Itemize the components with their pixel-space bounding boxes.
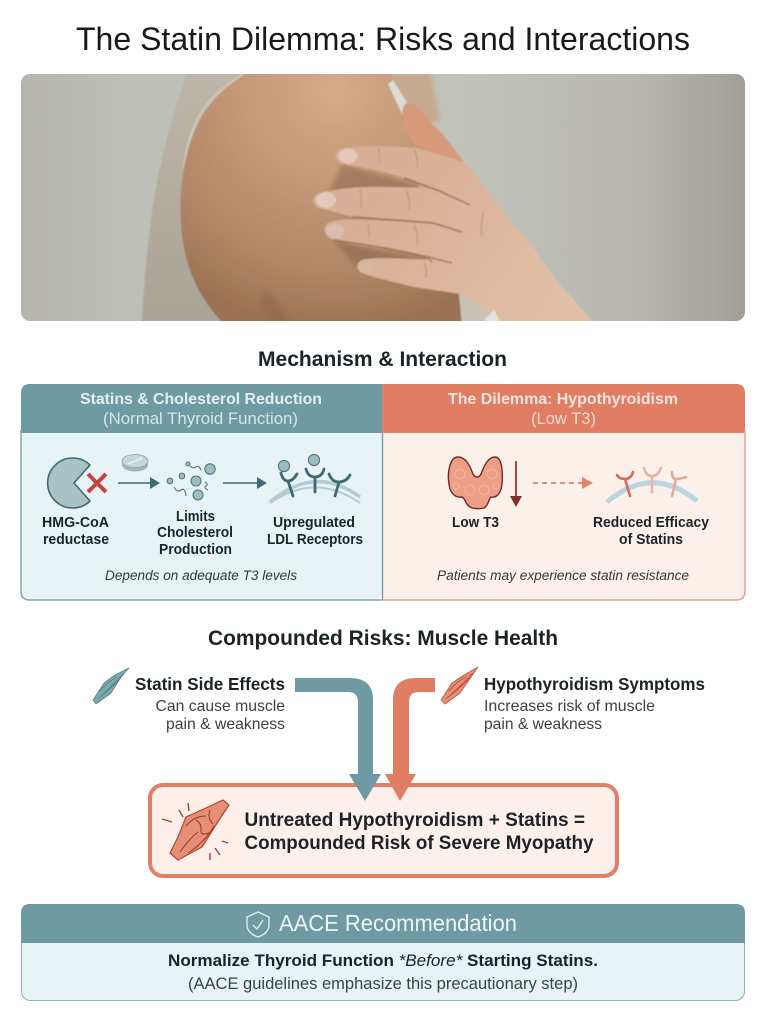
- panel heading: (Normal Thyroid Function): [103, 409, 298, 428]
- label: reduced efficacy: Reduced Efficacy: [593, 515, 709, 531]
- icon: strained muscle: [162, 800, 229, 860]
- text: hypothyroidism symptoms: pain & weakness: [484, 716, 602, 733]
- arrow: teal to callout: [295, 678, 381, 801]
- label: limits cholesterol production: [157, 509, 233, 558]
- label: limits cholesterol production: Cholesterol: [157, 525, 233, 541]
- panel: AACE recommendation: [21, 904, 745, 1000]
- icon: statin pill: [122, 454, 148, 472]
- label: low T3: Low T3: [452, 515, 499, 531]
- panel: statins and cholesterol reduction: [21, 384, 382, 600]
- callout text: Compounded Risk of Severe Myopathy: [244, 833, 594, 854]
- icon: thyroid gland: [448, 457, 502, 509]
- callout text: [244, 810, 594, 854]
- note: statin resistance: Patients may experience statin resistance: [437, 568, 689, 583]
- heading: compounded risks: Compounded Risks: Muscle Health: [208, 627, 558, 650]
- label: upregulated LDL receptors: [267, 515, 363, 548]
- text: statin side effects: Statin Side Effects: [135, 674, 285, 694]
- label: reduced efficacy: [593, 515, 709, 548]
- knuckle creases: [360, 148, 484, 278]
- icon: coral muscle: [441, 667, 478, 704]
- text: statin side effects: pain & weakness: [166, 716, 285, 733]
- label: reduced efficacy: of Statins: [619, 532, 683, 548]
- panel heading: (Low T3): [531, 409, 596, 428]
- arrow: T3 down: [510, 461, 522, 507]
- icon: cholesterol molecules: [167, 462, 215, 500]
- label: upregulated LDL receptors: Upregulated: [273, 515, 355, 531]
- title: The Statin Dilemma: Risks and Interactions: [76, 21, 690, 57]
- label: HMG-CoA reductase: [42, 515, 110, 548]
- icon: teal muscle: [93, 668, 129, 704]
- panel heading: [80, 391, 322, 428]
- fingers: [357, 258, 470, 294]
- panel heading: [448, 391, 678, 428]
- panel: the dilemma hypothyroidism: [382, 384, 745, 600]
- label: limits cholesterol production: Limits: [176, 509, 215, 525]
- tank top: [142, 74, 241, 321]
- icon: upregulated LDL receptors: [270, 454, 360, 503]
- arrow: coral to callout: [385, 678, 435, 801]
- thumb: [402, 103, 466, 165]
- bra strap: [388, 80, 408, 116]
- text: hypothyroidism symptoms: Hypothyroidism Symptoms: [484, 674, 705, 694]
- panel heading: The Dilemma: Hypothyroidism: [448, 391, 678, 408]
- icon: reduced receptors: [607, 468, 697, 502]
- label: HMG-CoA reductase: HMG-CoA: [42, 515, 110, 531]
- text: hypothyroidism symptoms: [484, 674, 705, 733]
- arrow: [118, 477, 160, 489]
- text: hypothyroidism symptoms: Increases risk of muscle: [484, 698, 655, 715]
- fingernails: [338, 148, 358, 164]
- arrow: [223, 477, 267, 489]
- arrow: dashed: [533, 477, 593, 489]
- photo: hand holding shoulder: [21, 70, 745, 325]
- heading: mechanism: Mechanism & Interaction: [258, 348, 507, 371]
- recommendation heading: AACE Recommendation: [279, 910, 517, 936]
- label: HMG-CoA reductase: reductase: [43, 532, 109, 548]
- finger shadows on shoulder: [329, 164, 425, 266]
- text: statin side effects: [135, 674, 285, 733]
- finger creases: [333, 178, 470, 263]
- recommendation text: Normalize Thyroid Function *Before* Starting Statins.: [168, 951, 598, 970]
- neck behind shoulder: [391, 74, 442, 124]
- callout: compounded risk of severe myopathy: [150, 785, 617, 876]
- label: limits cholesterol production: Production: [159, 542, 232, 558]
- panel heading: Statins & Cholesterol Reduction: [80, 391, 322, 408]
- note: depends on T3: Depends on adequate T3 levels: [105, 568, 297, 583]
- callout text: Untreated Hypothyroidism + Statins =: [244, 810, 585, 831]
- shoulder and arm: [181, 70, 470, 325]
- icon: shield check: [247, 912, 269, 937]
- wrist gap: [459, 296, 488, 321]
- recommendation text: (AACE guidelines emphasize this precautionary step): [188, 975, 578, 993]
- text: statin side effects: Can cause muscle: [156, 698, 285, 715]
- recommendation text: [168, 951, 598, 993]
- icon: HMG-CoA enzyme blocked: [48, 458, 106, 508]
- back of hand and wrist: [414, 147, 596, 325]
- label: upregulated LDL receptors: LDL Receptors: [267, 532, 363, 548]
